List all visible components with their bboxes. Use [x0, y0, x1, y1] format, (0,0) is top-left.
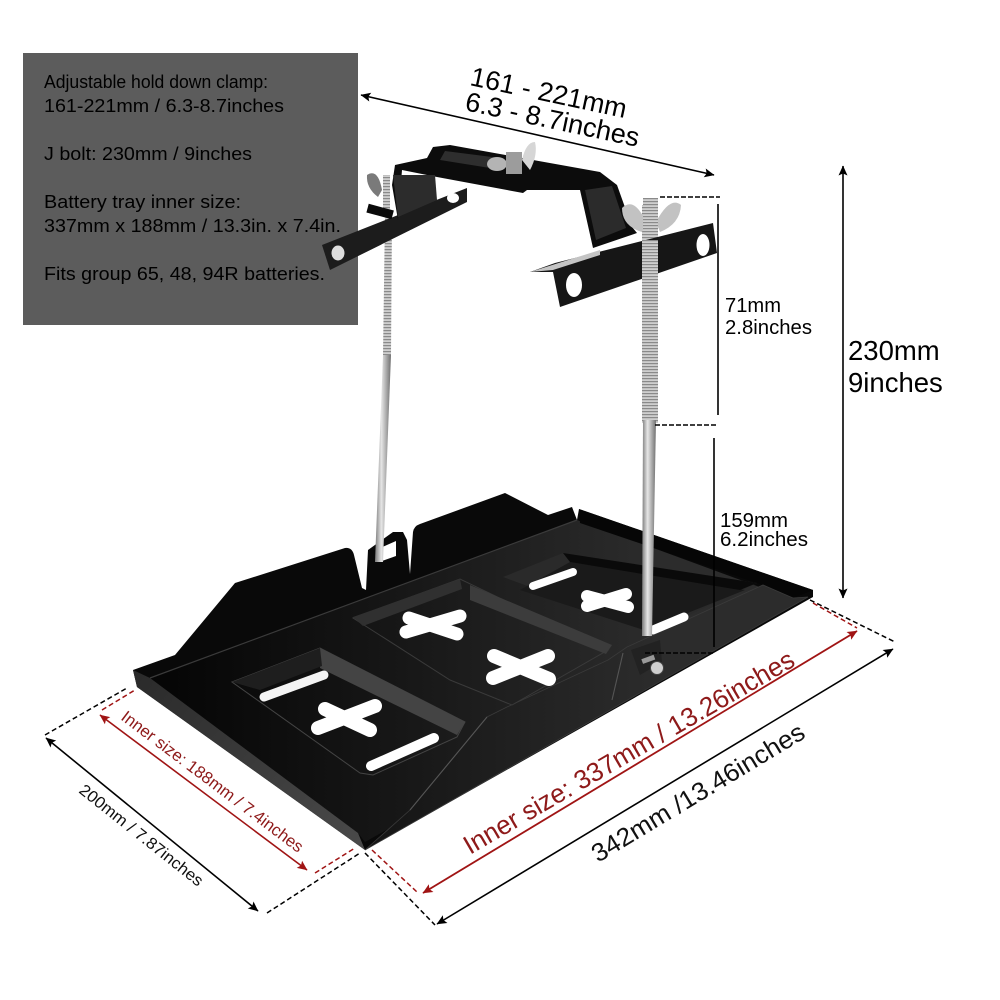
- tray silhouette with back wall: [133, 493, 813, 850]
- hold down clamp: [322, 142, 717, 307]
- centre wing nut: [487, 142, 536, 174]
- outer width dimension: [45, 688, 360, 913]
- battery pad 1: [232, 648, 465, 775]
- outer length dimension: [365, 600, 895, 925]
- right strap: [530, 223, 717, 307]
- plain rod length label: [720, 510, 808, 551]
- outer width dimension: 200mm / 7.87inches: [76, 781, 207, 890]
- J bolt height arrow: [842, 166, 844, 598]
- plain rod length label: 159mm: [720, 510, 788, 532]
- top width dimension arrow: [361, 95, 714, 175]
- J bolt height label: 230mm: [848, 335, 940, 366]
- front left lip: [133, 670, 365, 850]
- bolt over strap: [642, 240, 658, 300]
- J bolt height label: 9inches: [848, 367, 943, 398]
- ramp seam: [410, 653, 623, 810]
- right wing nut: [622, 198, 681, 236]
- battery pad 2: [353, 579, 612, 705]
- left strap: [322, 188, 467, 270]
- crease line: [150, 520, 577, 678]
- front right ramp: [365, 585, 808, 850]
- tray: [133, 493, 813, 850]
- thread length label: [725, 295, 812, 339]
- right back wall band: [579, 509, 813, 598]
- top width label: 161 - 221mm: [468, 62, 630, 124]
- inner length dimension: Inner size: 337mm / 13.26inches: [458, 644, 800, 860]
- left wing nut: [366, 173, 394, 219]
- specification text: [44, 71, 341, 284]
- specification text: Fits group 65, 48, 94R batteries.: [44, 263, 325, 284]
- grey specification box: [23, 53, 358, 325]
- specification text: 337mm x 188mm / 13.3in. x 7.4in.: [44, 215, 341, 236]
- thread length label: 71mm: [725, 295, 781, 317]
- inner width dimension: [100, 690, 355, 873]
- inner length dimension: [372, 603, 857, 893]
- plain rod length label: 6.2inches: [720, 529, 808, 551]
- top width label: 6.3 - 8.7inches: [463, 87, 642, 153]
- specification text: Battery tray inner size:: [44, 191, 241, 212]
- thread length bracket: [655, 197, 720, 425]
- right J bolt: [642, 205, 658, 636]
- inner width dimension: Inner size: 188mm / 7.4inches: [118, 707, 307, 856]
- main bracket: [392, 145, 637, 248]
- J bolt height label: [848, 335, 943, 398]
- tray floor: [150, 520, 795, 842]
- thread length label: 2.8inches: [725, 317, 812, 339]
- battery pad 3: [503, 553, 757, 633]
- specification text: Adjustable hold down clamp:: [44, 71, 268, 92]
- left J bolt: [375, 175, 392, 562]
- front bolt: [631, 640, 664, 675]
- specification text: J bolt: 230mm / 9inches: [44, 143, 252, 164]
- specification text: 161-221mm / 6.3-8.7inches: [44, 95, 284, 116]
- outer length dimension: 342mm /13.46inches: [587, 718, 810, 868]
- plain rod length bracket: [645, 438, 714, 653]
- tab slot: [380, 541, 396, 561]
